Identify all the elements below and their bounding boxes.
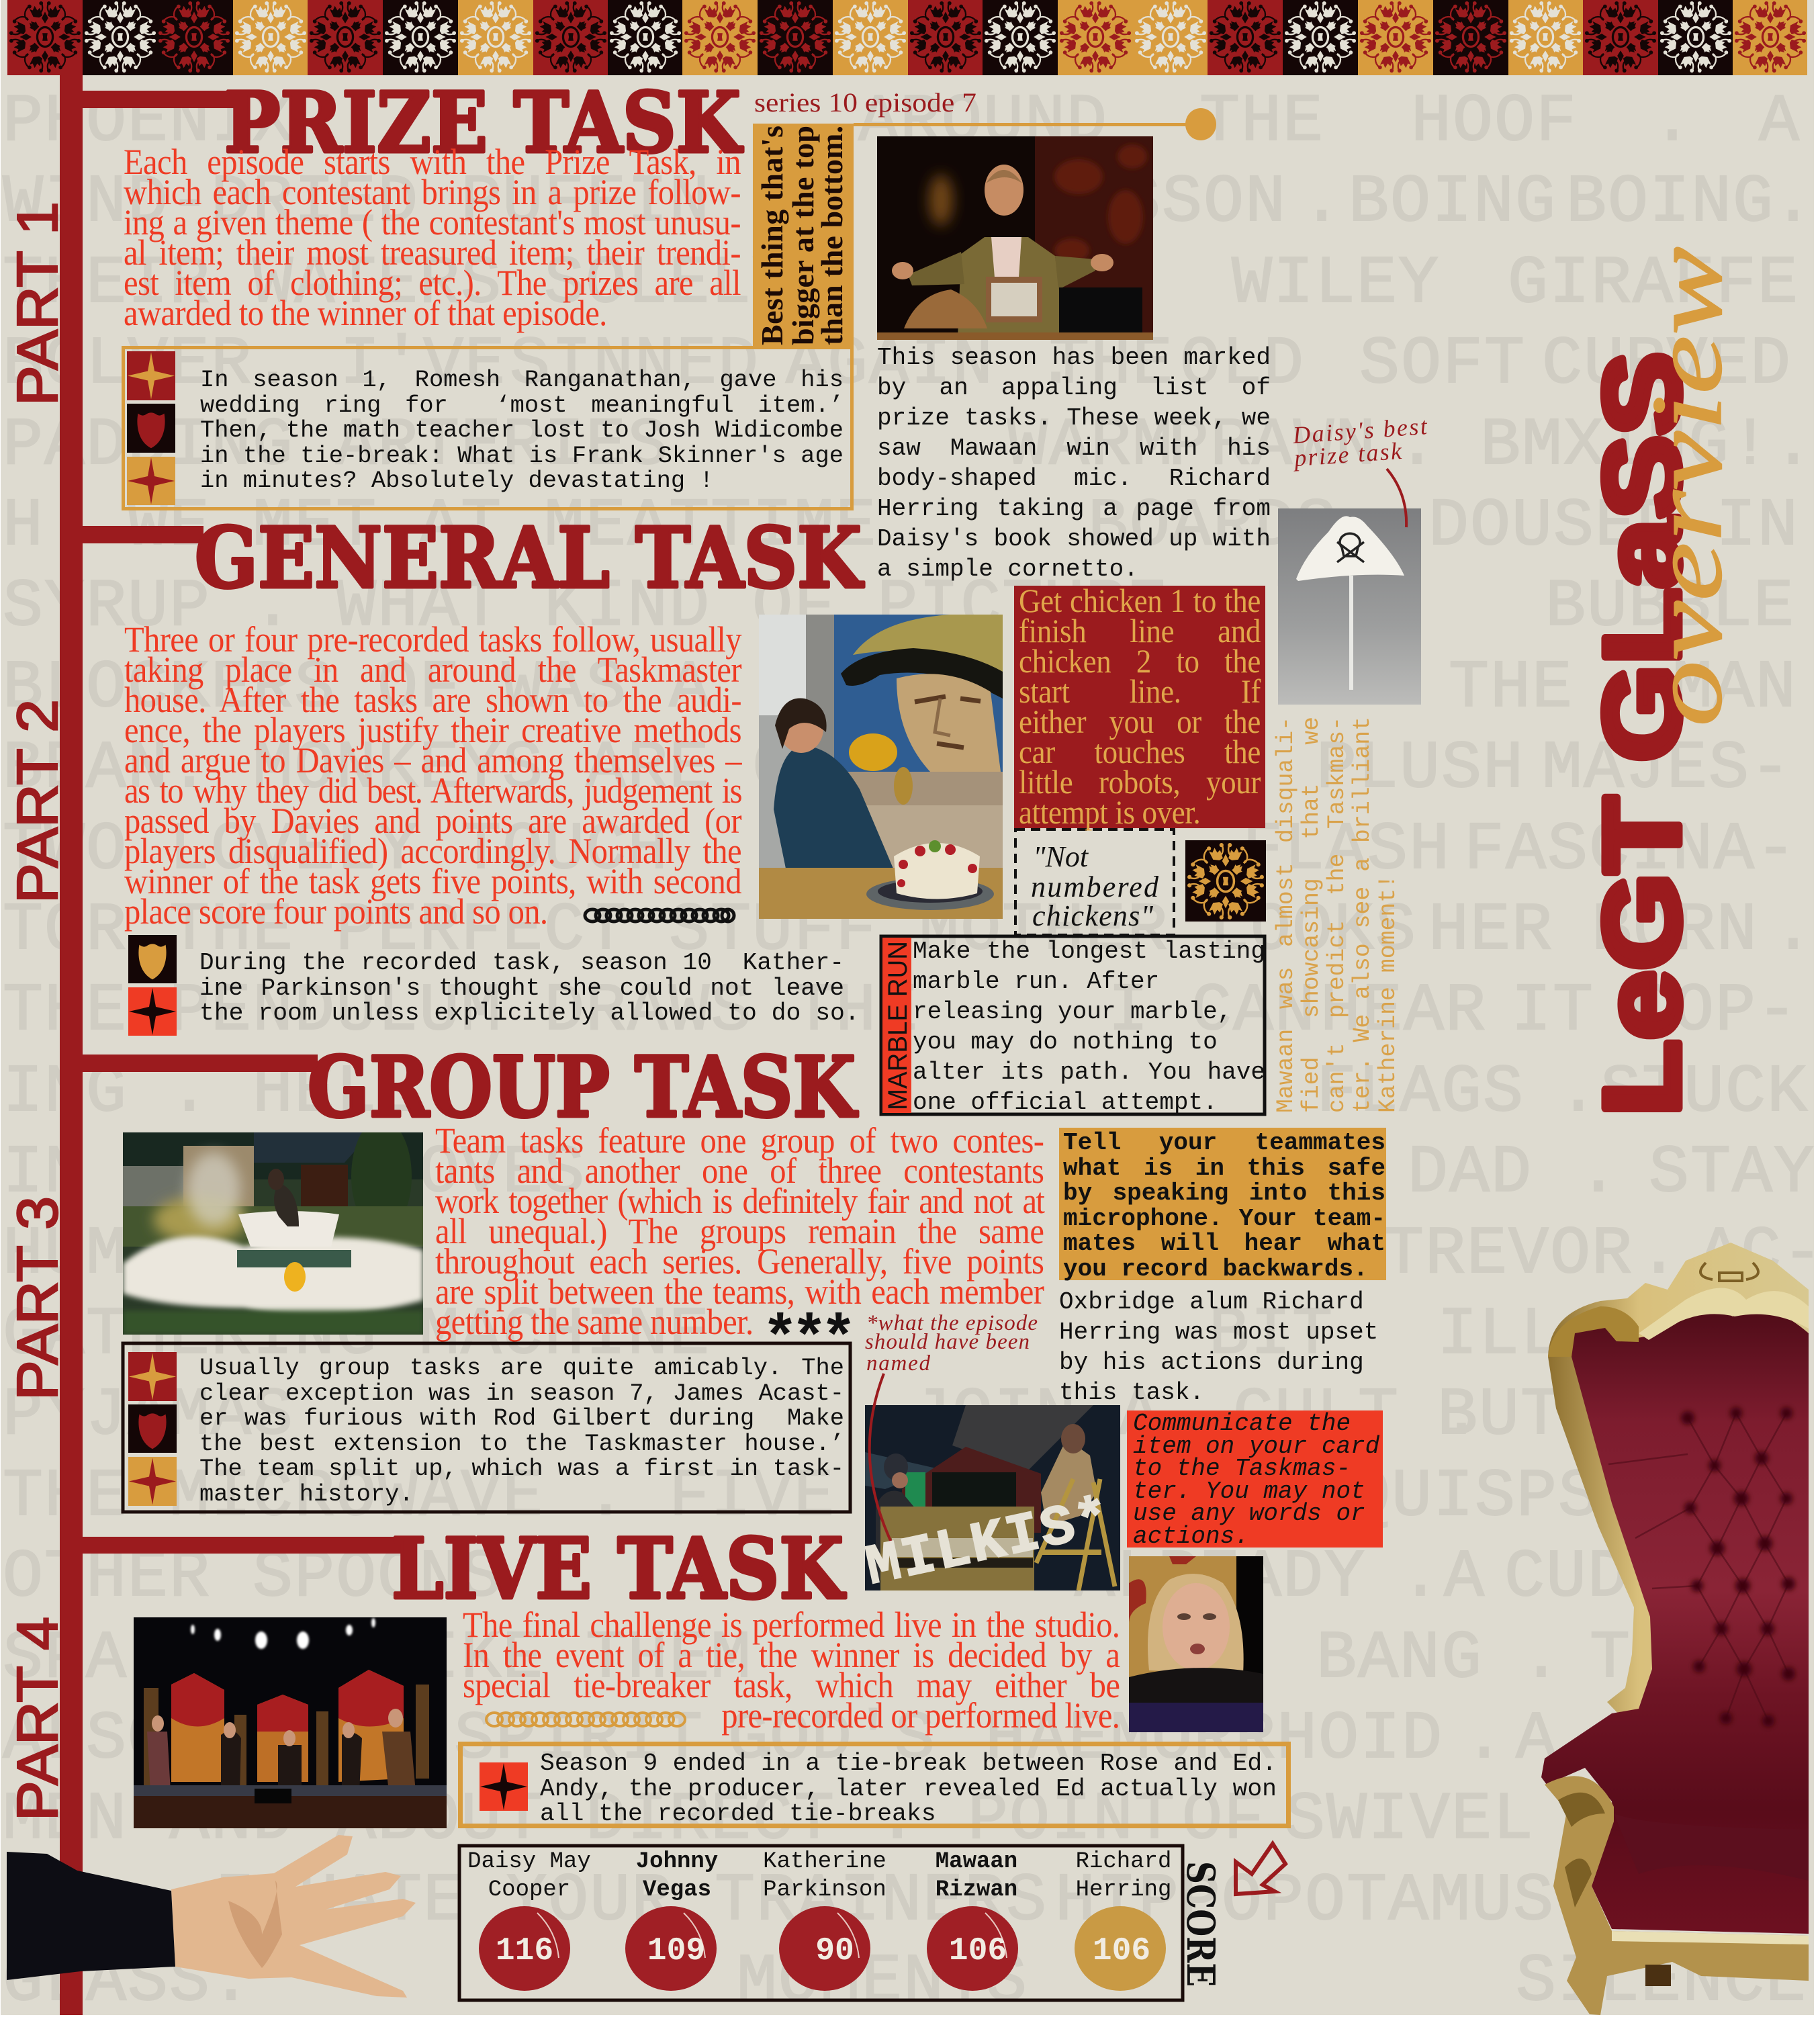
season commentary text	[877, 343, 1271, 584]
ghost typewriter background text: HOOF	[1411, 85, 1578, 161]
group task body text: work together (which is definitely fair and not at	[435, 1181, 1044, 1221]
prize callout text: In season 1, Romesh Ranganathan, gave his	[200, 367, 844, 394]
ghost typewriter background text: .	[1397, 408, 1439, 484]
gold quote box: than the bottom.	[815, 126, 849, 345]
general task icons	[128, 935, 177, 1036]
annotation: Daisy's best prize task	[1291, 412, 1428, 527]
part labels: PART 1	[6, 201, 70, 406]
chicken task text: chicken 2 to the	[1019, 642, 1261, 680]
ghost typewriter background text: BOING	[1566, 165, 1774, 241]
photo: live studio stage	[134, 1617, 447, 1828]
season commentary text: prize tasks. These week, we	[877, 404, 1271, 432]
contestant: Daisy May Cooper	[459, 1848, 600, 1904]
general task body text: Three or four pre-recorded tasks follow, usually	[124, 619, 741, 660]
general task body text: ence, the players justify their creative methods	[124, 710, 741, 750]
ghost typewriter background text: I'VE	[340, 327, 506, 403]
score seal: Richard Herring: 106	[1093, 1933, 1150, 1969]
ghost typewriter background text: A	[1444, 1540, 1486, 1616]
Oxbridge note: Herring was most upset	[1059, 1318, 1378, 1346]
ornament tile gold on black	[1185, 840, 1266, 922]
contestant: Richard Herring	[1053, 1848, 1194, 1904]
ghost typewriter background text: HEAR	[1320, 974, 1487, 1050]
ghost typewriter background text: .	[1101, 246, 1143, 322]
section titles	[195, 75, 864, 1618]
photo: host with prize tasks	[877, 136, 1153, 340]
ghost typewriter background text: BORN	[1592, 893, 1758, 969]
group callout text: clear exception was in season 7, James Acast-	[199, 1380, 844, 1406]
contestant: Katherine Parkinson	[754, 1848, 895, 1904]
prize task body text: al item; their most treasured item; their trendi-	[124, 232, 741, 273]
ghost typewriter background text: MEN AND ABOUT DIRECT .	[3, 1783, 919, 1858]
ghost typewriter background text: QUISPS	[1350, 1460, 1600, 1535]
live task body text: In the event of a tie, the winner is decided by a	[463, 1635, 1120, 1675]
vertical gold note: can't predict the Taskmas-	[1324, 717, 1351, 1113]
score seal: Richard Herring	[1075, 1906, 1166, 1991]
prize callout text: in minutes? Absolutely devastating !	[200, 467, 714, 494]
Communicate rule text	[1133, 1413, 1383, 1548]
section titles: GENERAL TASK	[195, 510, 864, 607]
ghost typewriter background text: SOFT	[1359, 327, 1526, 403]
ghost typewriter background text: THE	[1276, 570, 1401, 645]
ghost typewriter background text: CULT .	[1233, 1378, 1483, 1454]
arrow to the scores	[1236, 1844, 1285, 1894]
script word: overview: overview	[1631, 246, 1743, 727]
season commentary text: This season has been marked	[877, 344, 1271, 371]
ghost typewriter background text: SYRUP . WHAT KIND OF PICTURE	[3, 570, 1169, 645]
rule text: by speaking into this	[1063, 1179, 1385, 1207]
chicken task text: either you or the	[1019, 703, 1261, 740]
marble run text: releasing your marble,	[913, 998, 1232, 1026]
ghost typewriter background text: MAJES-	[1542, 731, 1792, 807]
ghost typewriter background text: .	[1302, 165, 1343, 241]
season commentary text: Daisy's book showed up with	[877, 525, 1271, 553]
group task body text: Team tasks feature one group of two contes-	[435, 1120, 1044, 1161]
section titles: GROUP TASK	[308, 1039, 858, 1136]
season commentary text: saw Mawaan win with his	[877, 435, 1271, 462]
prize task body text: est item of clothing; etc.). The prizes are all	[124, 263, 741, 303]
marble run text: one official attempt.	[913, 1089, 1218, 1116]
rule text: Tell your teammates	[1063, 1129, 1385, 1157]
ghost typewriter background text: PHOENIX	[3, 85, 294, 161]
gold quote box: Best thing that's	[755, 126, 789, 345]
Milkis caption on photo: MILKIS*	[861, 1487, 1116, 1601]
gold quote box: bigger at the top	[786, 126, 820, 345]
contestant: Johnny Vegas: Johnny	[636, 1849, 718, 1875]
marble run panel frame	[881, 936, 1265, 1114]
prize task body text	[124, 147, 741, 328]
dashed quote box: numbered	[1031, 870, 1159, 903]
ghost typewriter background text: HUMMING	[3, 1217, 294, 1293]
ghost typewriter background text: IN	[1716, 489, 1799, 565]
vertical score label: SCORE	[1178, 1861, 1223, 1987]
rule text: you record backwards.	[1063, 1255, 1368, 1283]
Communicate rule text: item on your card	[1133, 1433, 1379, 1460]
ghost typewriter background text: HIPPOPOTAMUS	[1055, 1864, 1555, 1940]
prize callout text: wedding ring for ‘most meaningful item.’	[200, 392, 844, 419]
ghost typewriter background text: TREVOR	[1383, 1217, 1633, 1293]
Communicate rule text: to the Taskmas-	[1133, 1455, 1351, 1482]
ghost typewriter background text: SWIVEL	[1285, 1783, 1535, 1858]
ghost typewriter background text: OLD	[1180, 327, 1305, 403]
group task body text: tants and another one of three contestants	[435, 1151, 1044, 1191]
contestant: Johnny Vegas: Vegas	[643, 1877, 711, 1903]
general task body text: and argue to Davies – and among themselves –	[124, 740, 741, 780]
ghost typewriter background text: BOARDS	[1088, 489, 1338, 565]
ghost typewriter background text: OTHER SPOONS	[3, 1540, 502, 1616]
live callout text: Season 9 ended in a tie-break between Rose and Ed.	[540, 1750, 1277, 1777]
ghost typewriter background text: BANG	[1316, 1621, 1483, 1697]
ghost typewriter background text: STAY	[1649, 1136, 1815, 1212]
ornamental tile header	[7, 0, 1807, 75]
live callout text	[540, 1751, 1277, 1827]
ghost typewriter background text: A	[1516, 1702, 1557, 1778]
ghost typewriter background text: THE	[1049, 327, 1174, 403]
marble run text: alter its path. You have	[913, 1059, 1265, 1086]
general task body text: passed by Davies and points are awarded (or	[124, 801, 741, 841]
prize task body text: ing a given theme ( the contestant's most unusu-	[124, 202, 741, 242]
ghost typewriter background text: WIND-DRIED PUFFIN	[3, 165, 711, 241]
prize callout frame	[124, 348, 852, 509]
group task body text: throughout each series. Generally, five points	[435, 1241, 1044, 1282]
score panel	[459, 1846, 1183, 2000]
group callout text: master history.	[199, 1480, 414, 1507]
ghost typewriter background text: COP-	[1632, 974, 1799, 1050]
general task body text: winner of the task gets five points, with second	[124, 861, 741, 901]
ghost typewriter background text: .	[1521, 1621, 1563, 1697]
live callout frame	[461, 1744, 1288, 1826]
ghost typewriter background text: I CAN	[1108, 974, 1316, 1050]
rule text	[1063, 1130, 1385, 1282]
ghost typewriter background text: .	[1773, 165, 1815, 241]
score seal: Daisy May Cooper	[479, 1906, 570, 1991]
part labels	[6, 201, 70, 1821]
marble run text: you may do nothing to	[913, 1028, 1218, 1056]
ghost typewriter background text: PLUSH	[1316, 731, 1525, 807]
ghost typewriter background text: GOD'S	[728, 1702, 936, 1778]
group callout frame	[123, 1343, 850, 1512]
chicken task text: little robots, your	[1019, 763, 1261, 801]
ghost typewriter background text: PYJAMAS	[3, 1378, 294, 1454]
Oxbridge note	[1059, 1287, 1395, 1408]
ghost typewriter background text: POINT	[968, 1783, 1176, 1858]
season commentary text: a simple cornetto.	[877, 555, 1138, 583]
group task body text: getting the same number.	[435, 1302, 753, 1342]
ghost typewriter background text: CUD	[1504, 1540, 1629, 1616]
photo: piano and ladder task	[865, 1405, 1120, 1590]
Communicate rule text: actions.	[1133, 1523, 1249, 1550]
ghost typewriter background text: .	[1464, 1702, 1506, 1778]
contestant: Mawaan Rizwan: Mawaan	[936, 1849, 1017, 1875]
general callout text: During the recorded task, season 10 Kather-	[199, 949, 844, 977]
ghost typewriter background text: .	[1578, 1136, 1620, 1212]
live callout text: all the recorded tie-breaks	[540, 1800, 936, 1828]
prize task body text: awarded to the winner of that episode.	[124, 293, 607, 333]
Oxbridge note: Oxbridge alum Richard	[1059, 1288, 1364, 1316]
score seal: Johnny Vegas	[625, 1906, 717, 1991]
annotation: episode name	[865, 1311, 1038, 1543]
group task body text: all unequal.) The groups remain the same	[435, 1211, 1044, 1251]
general callout text: ine Parkinson's thought she could not leave	[199, 974, 844, 1002]
season commentary text: by an appaling list of	[877, 374, 1271, 402]
part labels: PART 3	[6, 1196, 70, 1400]
ghost typewriter background text: .	[1558, 1055, 1600, 1131]
rule text: what is in this safe	[1063, 1154, 1385, 1182]
contestant: Richard Herring: Herring	[1076, 1877, 1171, 1903]
marble run text	[913, 936, 1265, 1118]
ghost typewriter background text: T	[1590, 1621, 1631, 1697]
ghost typewriter background text: IN ALL GROOVES	[3, 1136, 586, 1212]
ghost typewriter background text: GATHERING MACHINE	[3, 1298, 711, 1374]
ghost typewriter background text: MAN	[1672, 651, 1797, 727]
photo: studio portrait	[1129, 1556, 1263, 1732]
score seal: Johnny Vegas: 109	[647, 1933, 705, 1969]
ghost typewriter background text: TOR THE PERFECT STUFF MOTHER	[3, 893, 1169, 969]
prize task body text: which each contestant brings in a prize follow-	[124, 172, 741, 212]
photo: cornetto napkin hat	[1278, 508, 1421, 705]
general callout text: the room unless explicitely allowed to do so.	[199, 999, 860, 1027]
general task body text	[124, 625, 741, 927]
ghost typewriter background text: BUT	[1437, 1378, 1562, 1454]
season commentary text: body-shaped mic. Richard	[877, 465, 1271, 492]
dashed quote box	[1015, 830, 1174, 935]
live task ornament	[486, 1713, 685, 1726]
ghost typewriter background text: THE MICROWAVE . FIVE M	[3, 1460, 919, 1535]
chicken task text: car touches the	[1019, 733, 1261, 770]
chicken task text: Get chicken 1 to the	[1019, 582, 1261, 619]
ghost typewriter background text: I HATE YOUR TRAINERS .	[215, 1864, 1131, 1940]
ghost typewriter background text: TWO LOVELY TOUCH	[3, 813, 669, 889]
ghost typewriter background text: WARM	[1007, 408, 1174, 484]
ghost typewriter background text: SPIRIT .	[454, 1702, 787, 1778]
vertical gold note: fied showcasing that we	[1299, 717, 1325, 1113]
marble run panel frame: MARBLE RUN	[883, 941, 913, 1110]
contestant: Katherine Parkinson: Parkinson	[763, 1877, 886, 1903]
contestant: Daisy May Cooper: Cooper	[488, 1877, 570, 1903]
contestant: Katherine Parkinson: Katherine	[763, 1849, 886, 1875]
gold quote box	[753, 124, 854, 347]
prize callout text: Then, the math teacher lost to Josh Widicombe	[200, 417, 844, 444]
Oxbridge note: this task.	[1059, 1379, 1204, 1406]
contestant: Johnny Vegas	[606, 1848, 747, 1904]
general task body text: players disqualified) accordingly. Normally the	[124, 831, 741, 871]
throne chair	[1541, 1243, 1809, 2015]
live task body text: The final challenge is performed live in the studio.	[463, 1605, 1120, 1645]
general task ornament	[585, 909, 734, 922]
ghost typewriter background text: THE	[1449, 651, 1574, 727]
group task body text	[435, 1126, 1044, 1337]
ghost typewriter background text: BIT	[1209, 1298, 1334, 1374]
ghost typewriter background text: .	[1652, 85, 1694, 161]
vertical gold note	[1274, 717, 1402, 1113]
ghost typewriter background text: THE PENDULUM DRAWS THE	[3, 974, 919, 1050]
score seal: Mawaan Rizwan: 106	[949, 1933, 1007, 1969]
ghost typewriter background text: PADDING ARTERIES	[3, 408, 669, 484]
vertical gold note: ter. We also see a brilliant	[1350, 717, 1376, 1113]
gold rule sheet: Tell your teammates	[1059, 1128, 1386, 1280]
ghost typewriter background text: BUBBLE	[1545, 570, 1795, 645]
ghost typewriter background text: FLASH	[1242, 813, 1451, 889]
annotation: episode name: *what the episode	[866, 1311, 1038, 1335]
ghost typewriter background text: CURVED	[1542, 327, 1792, 403]
ghost typewriter background text: HER	[1428, 893, 1553, 969]
dashed quote box: chickens"	[1032, 899, 1154, 932]
live task body text: pre-recorded or performed live.	[721, 1695, 1120, 1736]
score seal: Mawaan Rizwan	[927, 1906, 1018, 1991]
Communicate rule text: Communicate the	[1133, 1410, 1351, 1437]
contestant: Daisy May Cooper: Daisy May	[467, 1849, 591, 1875]
group callout text: Usually group tasks are quite amicably. The	[199, 1355, 844, 1382]
ghost typewriter background text: OF	[1182, 1783, 1265, 1858]
ghost typewriter background text: LOOKS	[1209, 893, 1417, 969]
ghost typewriter background text: A	[1759, 85, 1801, 161]
photo: bathtub task	[123, 1132, 423, 1335]
ghost typewriter background text: ING . HELL	[3, 1055, 419, 1131]
marble run text: Make the longest lasting	[913, 938, 1265, 965]
ghost typewriter background text: SPA DOWN LIKE THEM	[3, 1621, 752, 1697]
group task body text: are split between the teams, with each member	[435, 1271, 1044, 1312]
chicken task text: start line. If	[1019, 672, 1261, 710]
group callout text: The team split up, which was a first in task-	[199, 1455, 844, 1482]
ghost typewriter background text: HAEMORRHOID	[985, 1702, 1443, 1778]
general task body text: taking place in and around the Taskmaster	[124, 649, 741, 690]
annotation: Daisy's best prize task: Daisy's best	[1291, 412, 1428, 449]
ghost typewriter background text: PRAWN	[1169, 408, 1377, 484]
general task body text: house. After the tasks are shown to the audi-	[124, 680, 741, 720]
timeline bar with section branches	[60, 67, 405, 2015]
contestant: Mawaan Rizwan	[906, 1848, 1047, 1904]
ghost typewriter background text: IT	[1511, 974, 1594, 1050]
vertical gold note: Mawaan was almost disquali-	[1273, 717, 1300, 1113]
ghost typewriter background text: BOING	[1349, 165, 1557, 241]
contestant: Mawaan Rizwan: Rizwan	[936, 1877, 1017, 1903]
ghost typewriter background text: .	[1773, 893, 1815, 969]
ghost typewriter background text: SINNED	[510, 327, 760, 403]
big vertical title: LeGT GLaSS	[1582, 352, 1702, 1116]
annotation: episode name: named	[866, 1351, 931, 1376]
vertical gold note: Katherine moment!	[1375, 875, 1402, 1113]
red rule sheet: Communicate	[1127, 1410, 1383, 1548]
ghost typewriter background text: JOIN A	[911, 1378, 1161, 1454]
live task body text	[463, 1610, 1120, 1731]
contestant: Richard Herring: Richard	[1076, 1849, 1171, 1875]
ghost typewriter background text: THE	[1199, 85, 1324, 161]
ghost typewriter background text: BMXING!	[1480, 408, 1772, 484]
live task body text: special tie-breaker task, which may either be	[463, 1665, 1120, 1705]
score seal: Daisy May Cooper: 116	[496, 1933, 553, 1969]
ghost typewriter background text: .	[1773, 408, 1815, 484]
ghost typewriter background text: FLAGS	[1316, 1055, 1525, 1131]
ghost typewriter background text: .	[1639, 1217, 1680, 1293]
ghost typewriter background text: BOLVER.	[3, 327, 294, 403]
prize task body text: Each episode starts with the Prize Task, in	[124, 142, 741, 182]
ghost typewriter background text: THEIR WATERS SOLELY	[3, 246, 794, 322]
ghost typewriter background text: BLOCKERS OF WAS A	[3, 651, 711, 727]
ghost typewriter background text: .	[1400, 1540, 1442, 1616]
Communicate rule text: use any words or	[1133, 1500, 1365, 1527]
chicken task text	[1019, 586, 1261, 827]
season commentary text: Herring taking a page from	[877, 495, 1271, 523]
series label: series 10 episode 7	[754, 87, 976, 118]
general task body text: as to why they did best. Afterwards, judgement is	[124, 770, 741, 811]
group callout text: the best extension to the Taskmaster house.’	[199, 1431, 844, 1458]
score seal: Katherine Parkinson	[779, 1906, 870, 1991]
ghost typewriter background text: ILL	[1437, 1298, 1562, 1374]
ghost typewriter background text: FASCINA-	[1464, 813, 1797, 889]
section titles: PRIZE TASK	[224, 75, 743, 172]
Communicate rule text: ter. You may not	[1133, 1478, 1365, 1505]
ghost typewriter background text: BEAN. MONKEYS ARE CLE	[3, 731, 877, 807]
gold connector line with dot	[854, 108, 1216, 140]
ghost typewriter background text: ALSO	[3, 1702, 169, 1778]
Oxbridge note: by his actions during	[1059, 1349, 1364, 1376]
general task body text: place score four points and so on.	[124, 891, 547, 932]
dashed quote box: "Not	[1033, 840, 1089, 873]
annotation: episode name: should have been	[865, 1330, 1030, 1354]
part labels: PART 2	[6, 699, 70, 903]
chicken task red card background	[1014, 586, 1265, 828]
group callout text	[199, 1356, 844, 1507]
photo: task with painting and cake	[759, 615, 1003, 919]
chicken task text: attempt is over.	[1019, 793, 1200, 831]
rule text: mates will hear what	[1063, 1230, 1385, 1257]
ghost typewriter background text: AROUND	[858, 85, 1108, 161]
ghost typewriter background text: ALREADY	[1075, 1540, 1366, 1616]
live callout text: Andy, the producer, later revealed Ed actually won	[540, 1775, 1277, 1803]
rule text: microphone. Your team-	[1063, 1205, 1385, 1232]
ghost typewriter background text: DAD	[1408, 1136, 1533, 1212]
ghost typewriter background text: GIRAFFE	[1508, 246, 1799, 322]
ghost typewriter background text: H. WE MET AT MEATTIME	[3, 489, 877, 565]
prize callout text: in the tie-break: What is Frank Skinner's age	[200, 442, 844, 469]
marble run text: marble run. After	[913, 968, 1159, 995]
group callout text: er was furious with Rod Gilbert during Make	[199, 1405, 844, 1432]
general callout text	[199, 950, 844, 1026]
ghost typewriter background text: AGAIN .	[786, 327, 1077, 403]
ghost typewriter background text: LESSON	[1037, 165, 1287, 241]
score seal: Katherine Parkinson: 90	[815, 1933, 854, 1969]
ghost typewriter background text: WILEY	[1232, 246, 1440, 322]
part labels: PART 4	[6, 1617, 70, 1821]
ghost typewriter background text: DOUSED	[1428, 489, 1678, 565]
hand with sleeve	[7, 1835, 416, 1998]
ghost typewriter background text: STUCK	[1600, 1055, 1809, 1131]
asterisks: ***	[768, 1300, 850, 1368]
section titles: LIVE TASK	[392, 1521, 846, 1618]
annotation: Daisy's best prize task: prize task	[1291, 437, 1403, 472]
chicken task text: finish line and	[1019, 612, 1261, 649]
prize callout text	[200, 368, 844, 494]
